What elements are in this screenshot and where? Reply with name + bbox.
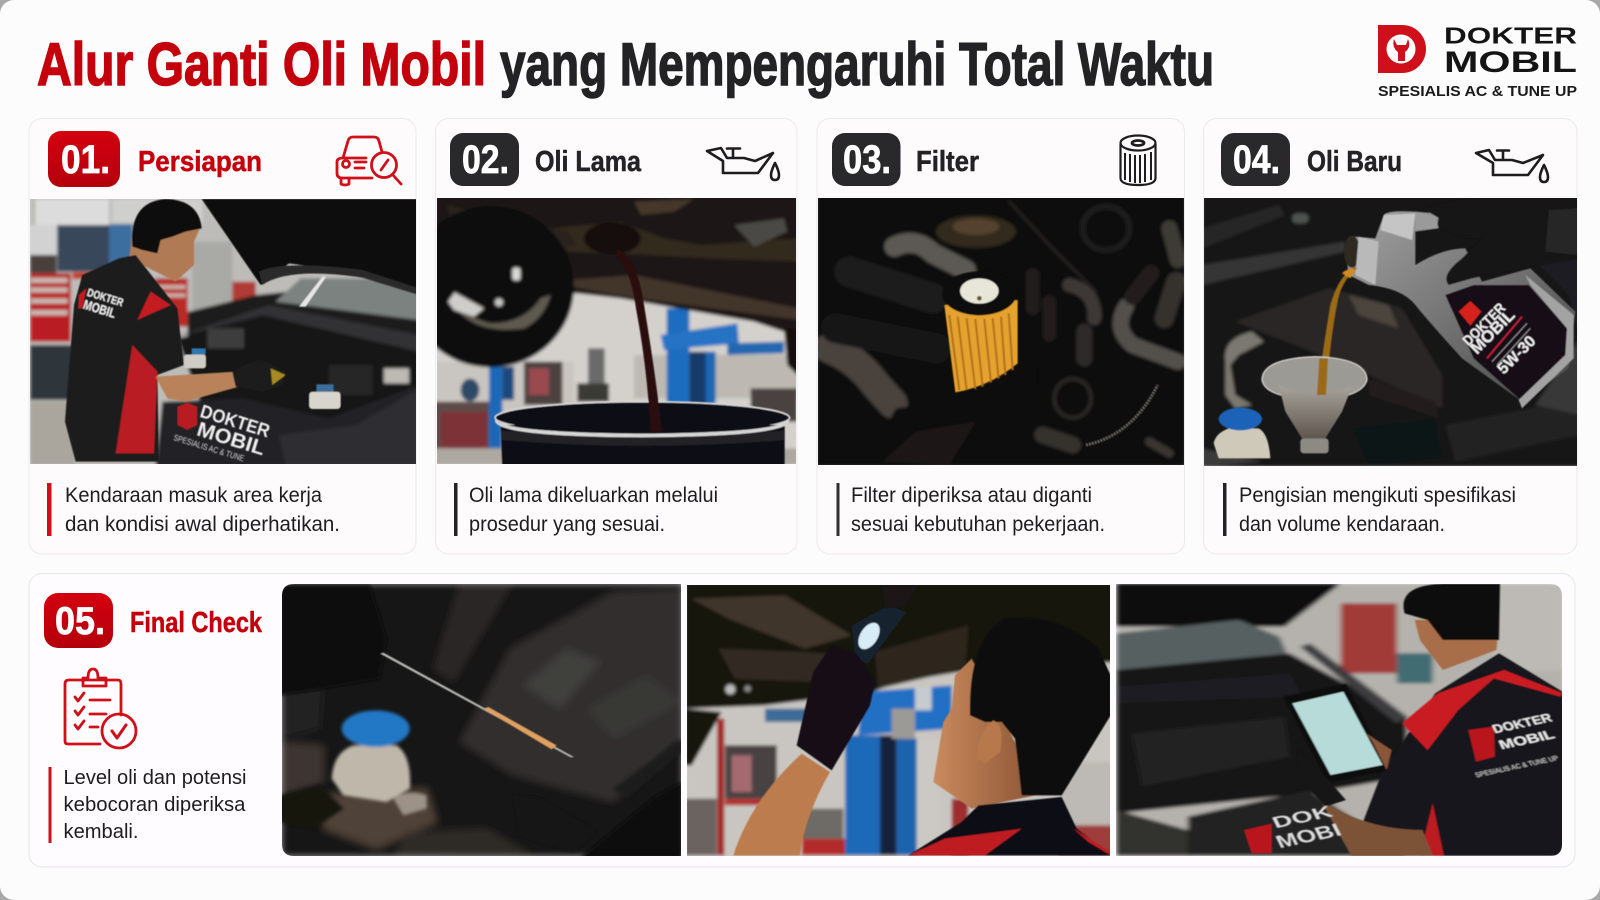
photo: pouring new oil through funnel: [1202, 195, 1580, 467]
description: Oli lama dikeluarkan melalui: [469, 484, 718, 507]
step badge 05: 05.: [55, 600, 105, 643]
title: [37, 31, 1214, 98]
icon: oil can: [707, 148, 779, 180]
step badge 01: 01.: [61, 138, 110, 182]
panel: step 05 Final Check: [29, 574, 1575, 867]
heading: Oli Lama: Oli Lama: [535, 146, 642, 178]
step badge 01: [48, 131, 120, 187]
icon: oil filter: [1120, 136, 1156, 185]
icon: clipboard checklist: [65, 669, 136, 748]
description: dan kondisi awal diperhatikan.: [65, 513, 340, 536]
description: [65, 484, 340, 536]
photo: pouring new oil through funnel: MOBIL: [1466, 306, 1519, 358]
description: kembali.: [64, 820, 138, 843]
accent bar: [836, 483, 840, 536]
icon: oil can: [1476, 150, 1548, 182]
description: [64, 766, 246, 843]
accent bar: [48, 767, 52, 843]
step badge 04: [1221, 133, 1290, 186]
heading: Oli Baru: Oli Baru: [1307, 146, 1402, 178]
accent bar: [454, 483, 458, 536]
description: Kendaraan masuk area kerja: [65, 484, 322, 507]
description: [1239, 484, 1516, 536]
step badge 03: [832, 133, 900, 186]
photo: pouring new oil through funnel: DOKTER: [1460, 300, 1509, 349]
description: Pengisian mengikuti spesifikasi: [1239, 484, 1516, 507]
step badge 02: 02.: [462, 138, 509, 182]
photo: technician with tablet: [1116, 583, 1565, 857]
description: Level oli dan potensi: [64, 766, 246, 789]
title: yang Mempengaruhi Total Waktu: [500, 31, 1214, 98]
logo: Dokter Mobil: DOKTER: [1444, 22, 1578, 48]
step badge 05: [44, 593, 113, 648]
accent bar: [1223, 483, 1226, 536]
photo: technician at engine bay: [29, 195, 419, 467]
logo: Dokter Mobil: [1378, 22, 1578, 100]
photo: technician with tablet: MOBIL: [1496, 727, 1557, 752]
panel: step 04 Oli Baru: [1202, 118, 1580, 554]
panel: step 03 Filter: [816, 118, 1186, 554]
accent bar: [47, 483, 52, 536]
photo: pouring new oil through funnel: 5W-30: [1494, 333, 1540, 378]
photo: dipstick check: [280, 582, 684, 858]
logo: Dokter Mobil: MOBIL: [1444, 46, 1577, 79]
photo: old oil draining: [437, 198, 796, 464]
heading: Final Check: Final Check: [130, 607, 263, 639]
step badge 03: 03.: [843, 138, 891, 182]
panel: step 02 Oli Lama: [407, 118, 799, 554]
heading: Persiapan: Persiapan: [138, 146, 262, 178]
icon: car with magnifier: [337, 137, 401, 185]
description: kebocoran diperiksa: [64, 793, 246, 816]
photo: technician at engine bay: DOKTER: [198, 400, 273, 442]
title: Alur Ganti Oli Mobil: [37, 31, 486, 98]
step badge 04: 04.: [1233, 138, 1280, 182]
photo: technician at engine bay: MOBIL: [81, 297, 118, 321]
photo: technician with tablet: MOBI: [1272, 819, 1345, 852]
step badge 02: [450, 133, 519, 186]
photo: oil filter held above engine: [816, 195, 1186, 467]
photo: inspection under car with work light: [685, 582, 1115, 858]
logo: Dokter Mobil: SPESIALIS AC & TUNE UP: [1378, 83, 1577, 100]
heading: Filter: Filter: [916, 146, 979, 178]
photo: technician at engine bay: DOKTER: [85, 287, 125, 309]
description: [469, 484, 718, 536]
description: prosedur yang sesuai.: [469, 513, 665, 536]
description: dan volume kendaraan.: [1239, 513, 1445, 536]
photo: technician with tablet: DOK: [1269, 803, 1336, 832]
description: Filter diperiksa atau diganti: [851, 484, 1092, 507]
description: [851, 484, 1105, 536]
photo: technician at engine bay: MOBIL: [194, 418, 268, 460]
description: sesuai kebutuhan pekerjaan.: [851, 513, 1105, 536]
panel: step 01 Persiapan: [29, 118, 419, 554]
